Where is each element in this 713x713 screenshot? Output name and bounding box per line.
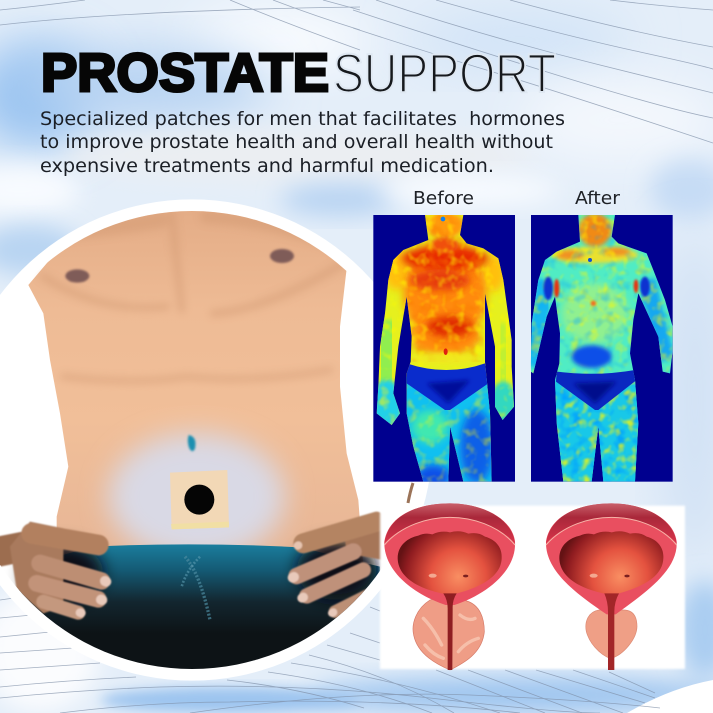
description text: expensive treatments and harmful medication. — [40, 155, 494, 177]
thermal image: after — [531, 213, 673, 482]
description text — [40, 108, 565, 177]
white circle frame — [0, 199, 433, 681]
title: SUPPORT: SUPPORT — [333, 42, 556, 104]
bladder wall — [384, 503, 515, 605]
after texture — [531, 215, 673, 482]
background: corner white swoosh — [627, 680, 713, 713]
thermal arms — [383, 320, 390, 387]
normal prostate gland — [586, 610, 637, 658]
elbow sliver — [408, 483, 413, 503]
torso muscle shading — [40, 213, 343, 381]
normal bladder cavity — [559, 531, 663, 595]
normal urethra — [604, 593, 619, 670]
after underwear — [556, 370, 637, 410]
normal prostate diagram — [546, 503, 677, 670]
thermal underwear — [407, 363, 488, 410]
left hand — [0, 522, 106, 613]
lower abdomen glow — [108, 433, 285, 560]
thermal legs — [405, 377, 492, 482]
ureter openings — [429, 574, 437, 578]
thermal image: before — [370, 212, 517, 488]
thermal chest and belly — [403, 243, 487, 343]
urethra — [443, 593, 457, 670]
torso — [28, 200, 363, 567]
before label: Before — [413, 188, 474, 209]
after lower abdomen — [572, 345, 612, 368]
after label: After — [575, 188, 621, 209]
prostate comparison panel — [380, 503, 685, 670]
bladder cavity — [398, 531, 502, 595]
patch dot — [184, 485, 214, 515]
normal ureter openings — [590, 574, 598, 578]
title — [41, 42, 556, 104]
navel — [188, 435, 195, 451]
normal bladder wall — [546, 503, 677, 614]
title: PROSTATE: PROSTATE — [41, 43, 329, 103]
nipples — [65, 249, 294, 283]
after chest — [562, 283, 628, 343]
patch — [170, 470, 229, 529]
photo circle: torso with patch — [0, 199, 433, 681]
after arms — [533, 280, 545, 367]
right hand — [293, 517, 383, 613]
normal bladder top band — [546, 503, 677, 543]
after legs — [553, 377, 640, 482]
thermal texture — [408, 215, 483, 362]
description text: to improve prostate health and overall health without — [40, 131, 553, 153]
description text: Specialized patches for men that facilitates hormones — [40, 108, 565, 130]
shorts — [13, 540, 380, 673]
white panel — [380, 506, 685, 669]
enlarged prostate diagram — [384, 503, 515, 670]
enlarged prostate gland — [413, 598, 484, 670]
bladder top band — [384, 503, 515, 543]
